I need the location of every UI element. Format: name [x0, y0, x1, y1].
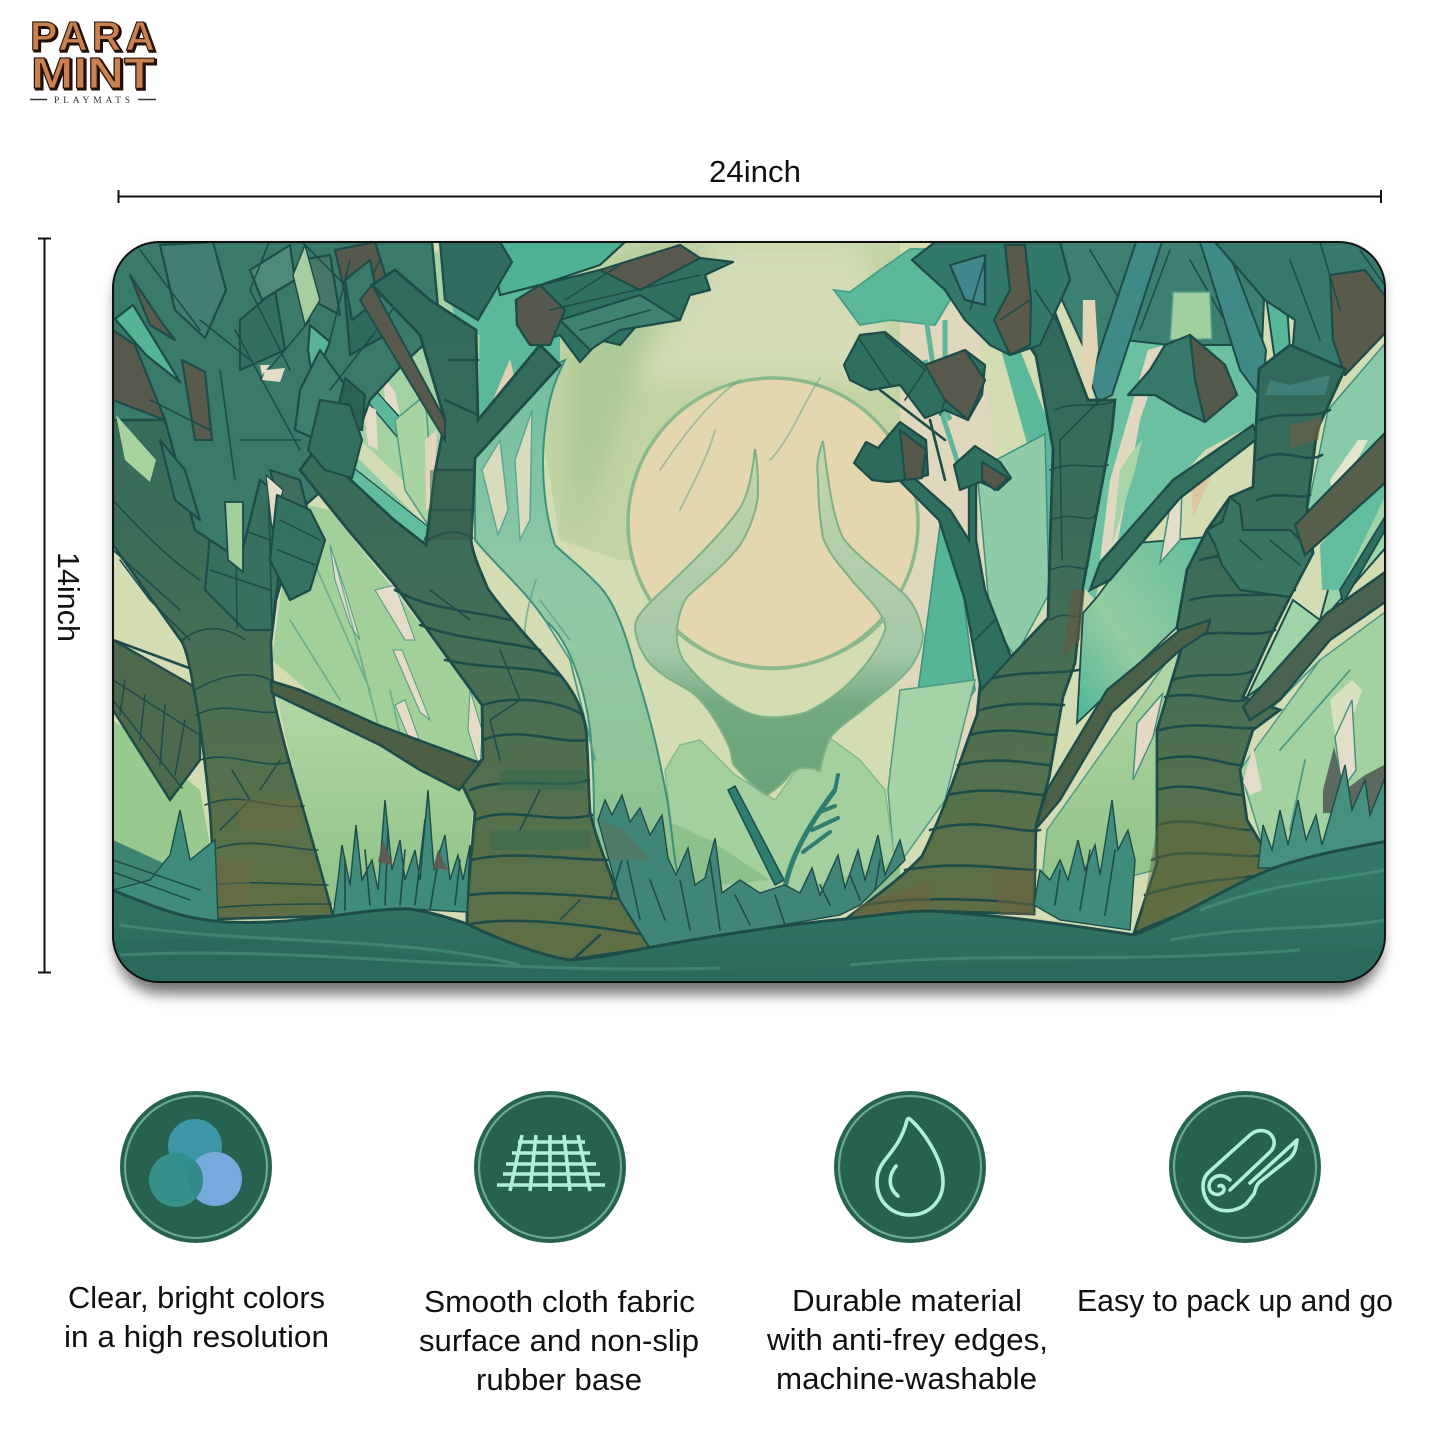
small sprout [728, 775, 838, 888]
feature: durable material [766, 1091, 1048, 1396]
tree 4: right trunk [1134, 345, 1345, 933]
distant stems right [834, 242, 1388, 900]
moon [628, 378, 918, 668]
caption [64, 1280, 329, 1354]
playmat forest illustration [112, 240, 1388, 985]
icon: water drop [834, 1091, 986, 1243]
feature: bright colors [64, 1091, 329, 1354]
feature: easy to pack [1077, 1091, 1393, 1318]
branches of tree 4 [1035, 430, 1388, 830]
caption [419, 1284, 699, 1397]
foliage: spiky cluster above trunk 2 [440, 242, 733, 362]
logo: Paramint Playmats: MINT [32, 50, 157, 100]
tree 2: large curved trunk [300, 270, 650, 960]
caption: surface and non-slip [419, 1323, 699, 1358]
caption: with anti-frey edges, [766, 1322, 1048, 1357]
logo: Paramint Playmats: PARA [30, 13, 155, 59]
icon: rolled mat [1169, 1091, 1321, 1243]
logo: Paramint Playmats: MINT [31, 49, 155, 98]
logo: Paramint Playmats: PLAYMATS [54, 96, 130, 106]
playmat shadow [116, 250, 1382, 994]
height dimension line: 14inch [51, 552, 86, 642]
caption: Clear, bright colors [68, 1280, 325, 1315]
ground water [112, 841, 1388, 985]
caption: machine-washable [776, 1361, 1037, 1396]
playmat border [113, 242, 1385, 982]
tree 1 canopy [113, 240, 440, 572]
width dimension line [118, 154, 1381, 203]
tree 3: center right trunk [846, 300, 1115, 919]
icon: three colour circles [120, 1091, 272, 1243]
logo: Paramint Playmats: PARA [32, 14, 156, 60]
height dimension line [38, 238, 86, 973]
branch A from trunk 3 to trunk 4 [1090, 425, 1258, 590]
sky background [113, 242, 1385, 982]
tree 1: left trunk [114, 421, 333, 920]
grass tufts [113, 747, 1388, 948]
branch joining trunk 1 and 2 [271, 681, 480, 790]
small tree in front of moon [844, 332, 1011, 690]
foliage: tree 1 side leaves [270, 400, 362, 600]
horns emblem [635, 441, 923, 795]
pale central trunk [475, 360, 682, 900]
icon: fabric grid [474, 1091, 626, 1243]
mountains [665, 738, 900, 900]
foliage: top right canopy [912, 242, 1388, 560]
caption: in a high resolution [64, 1319, 329, 1354]
tree: lower left branches [113, 640, 200, 800]
caption: rubber base [476, 1362, 642, 1397]
logo: Paramint Playmats [30, 13, 157, 106]
caption: Smooth cloth fabric [424, 1284, 695, 1319]
width dimension line: 24inch [709, 154, 801, 189]
caption: Durable material [792, 1283, 1022, 1318]
distant stems left [113, 242, 560, 925]
blue-teal stems right [1082, 242, 1290, 415]
caption [766, 1283, 1048, 1396]
feature: cloth fabric [419, 1091, 699, 1397]
caption: Easy to pack up and go [1077, 1283, 1393, 1318]
